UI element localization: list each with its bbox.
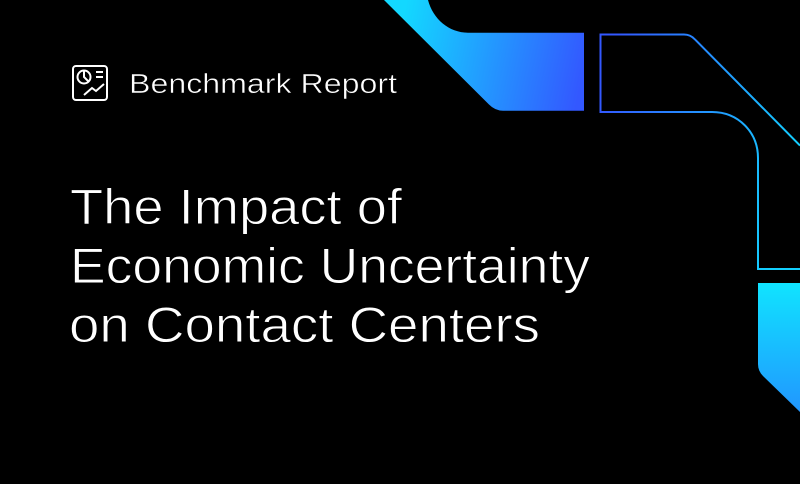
title: The Impact of <box>70 179 402 235</box>
icon: report chart <box>73 66 107 100</box>
title: on Contact Centers <box>69 297 540 353</box>
shape: outlined connector <box>600 34 800 269</box>
shape: right gradient band <box>758 283 800 412</box>
label: Benchmark Report: Benchmark Report <box>129 68 397 99</box>
title: Economic Uncertainty <box>70 238 590 294</box>
shape: top gradient band <box>384 0 584 111</box>
title <box>69 179 590 353</box>
